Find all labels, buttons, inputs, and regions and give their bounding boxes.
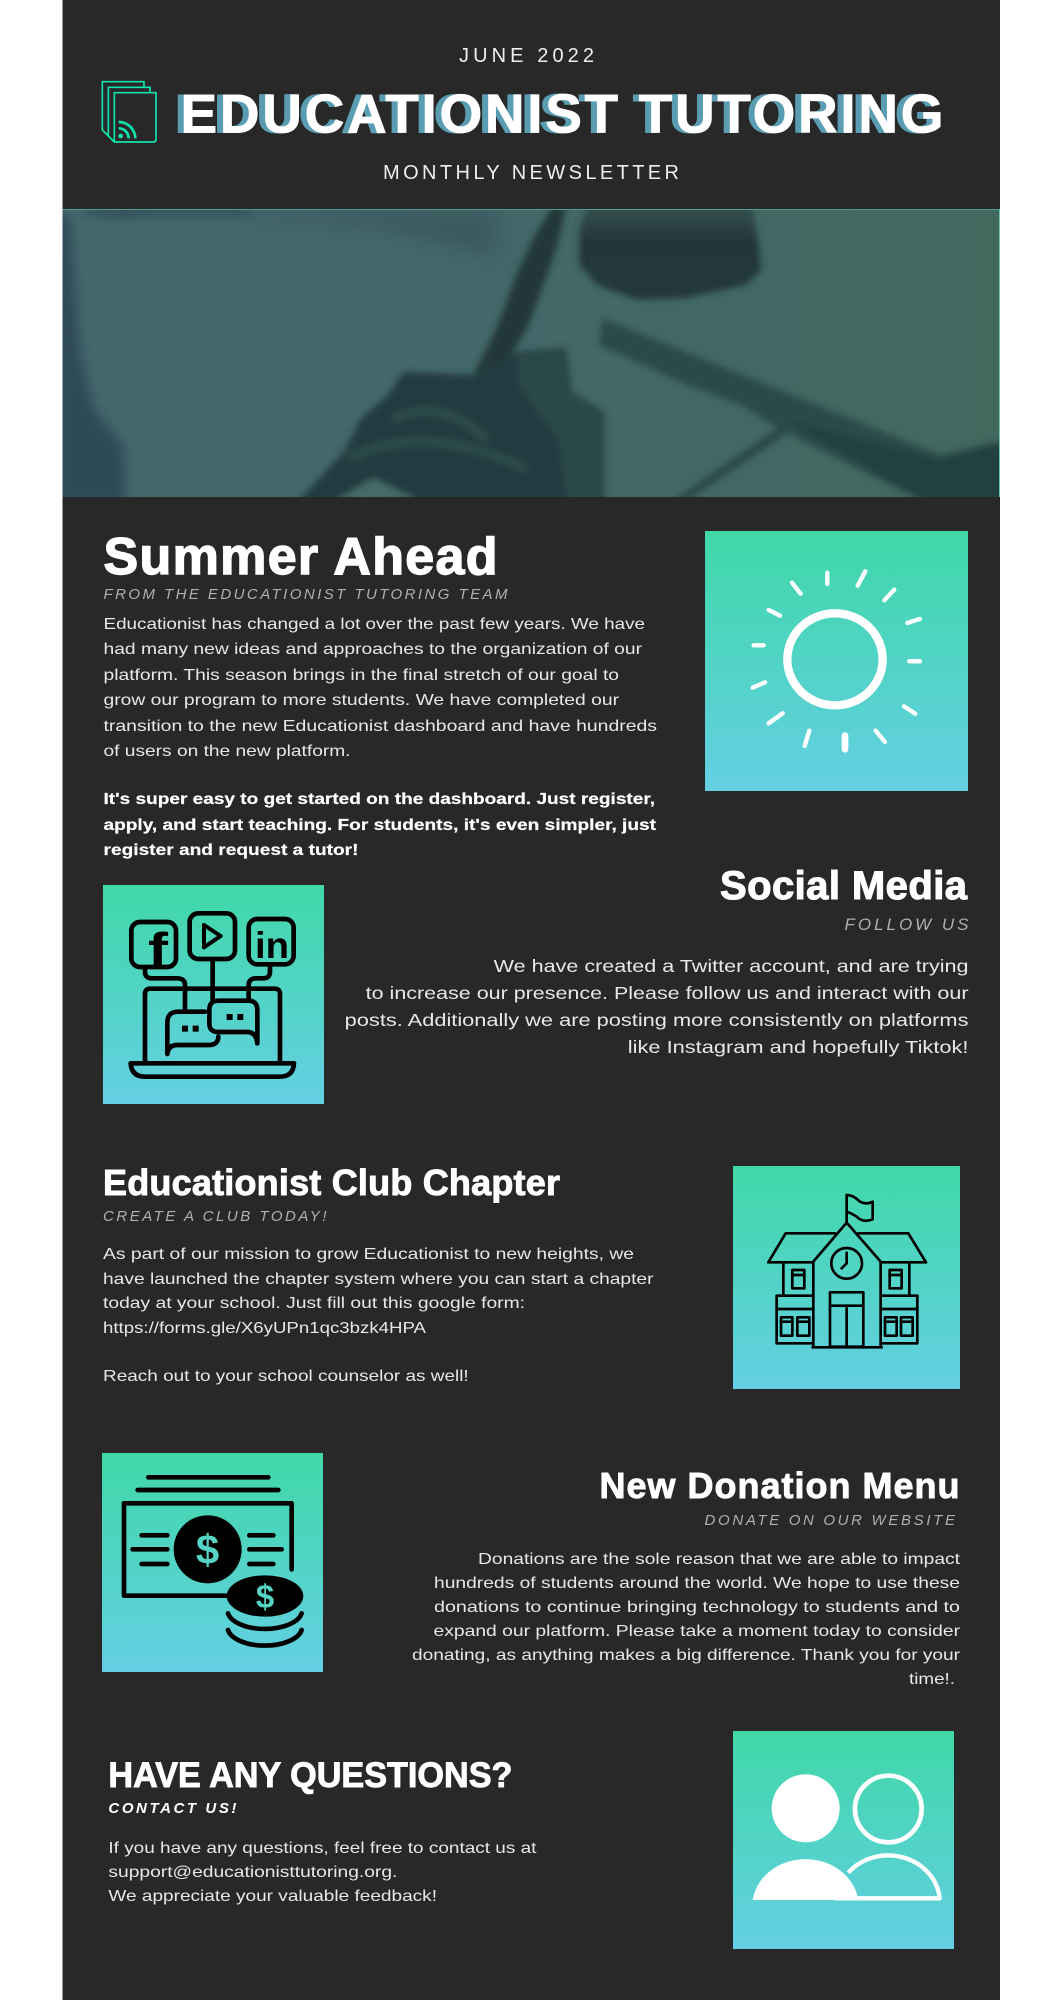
body text	[412, 1551, 961, 1688]
dollar signs: $	[256, 1578, 274, 1615]
heading: Social Media	[720, 864, 968, 908]
heading: Educationist Club Chapter	[103, 1162, 560, 1203]
bold callout text: It's super easy to get started on the dashboard. Just register,	[104, 791, 655, 808]
body text: had many new ideas and approaches to the organization of our	[104, 641, 643, 658]
icon: school building	[733, 1166, 960, 1389]
body text: today at your school. Just fill out this google form:	[103, 1295, 525, 1312]
body text: Educationist has changed a lot over the past few years. We have	[104, 616, 645, 633]
body text: We appreciate your valuable feedback!	[108, 1888, 437, 1905]
body text: hundreds of students around the world. We hope to use these	[434, 1575, 960, 1592]
dollar signs	[196, 1526, 274, 1615]
panel: new donation menu	[102, 1453, 961, 1688]
body text: donating, as anything makes a big difference. Thank you for your	[412, 1647, 961, 1664]
heading: New Donation Menu	[600, 1465, 960, 1506]
hero photo: hand writing with pencil	[55, 205, 1005, 505]
body text: We have created a Twitter account, and are trying	[494, 956, 968, 976]
title: EDUCATIONIST TUTORING	[180, 82, 944, 144]
body text: expand our platform. Please take a moment today to consider	[434, 1623, 961, 1640]
subheading: CREATE A CLUB TODAY!	[103, 1208, 327, 1225]
panel: social media	[103, 864, 969, 1104]
bold callout text: apply, and start teaching. For students, it's even simpler, just	[104, 817, 656, 834]
app letters	[148, 923, 289, 975]
title: EDUCATIONIST TUTORING	[174, 82, 938, 144]
body text	[103, 1246, 654, 1385]
dollar signs: $	[196, 1526, 219, 1573]
body text: support@educationisttutoring.org.	[108, 1864, 397, 1881]
app letters: f	[148, 923, 169, 975]
body text: Donations are the sole reason that we are able to impact	[478, 1551, 961, 1568]
body text: like Instagram and hopefully Tiktok!	[628, 1037, 968, 1057]
subheading: FOLLOW US	[844, 915, 969, 934]
icon: two people	[733, 1731, 954, 1949]
body text: transition to the new Educationist dashboard and have hundreds	[104, 718, 657, 735]
date line: JUNE 2022	[459, 45, 594, 67]
body text	[345, 956, 969, 1057]
body text: to increase our presence. Please follow us and interact with our	[366, 983, 969, 1003]
title: EDUCATIONIST TUTORING	[178, 82, 940, 144]
app letters: in	[255, 925, 289, 966]
panel: educationist club chapter	[103, 1162, 960, 1389]
body text: posts. Additionally we are posting more consistently on platforms	[345, 1010, 969, 1030]
icon: sun	[705, 531, 968, 791]
subtitle: MONTHLY NEWSLETTER	[383, 162, 679, 184]
body text: donations to continue bringing technology to students and to	[434, 1599, 960, 1616]
subheading: FROM THE EDUCATIONIST TUTORING TEAM	[104, 586, 508, 603]
subheading: CONTACT US!	[108, 1800, 236, 1817]
body text: As part of our mission to grow Educationist to new heights, we	[103, 1246, 634, 1263]
body text: time!.	[909, 1671, 955, 1688]
icon: logo stacked pages with rss signal	[102, 82, 156, 142]
panel: summer ahead	[104, 528, 968, 859]
body text: https://forms.gle/X6yUPn1qc3bzk4HPA	[103, 1320, 426, 1337]
subheading: DONATE ON OUR WEBSITE	[704, 1512, 956, 1529]
body text: of users on the new platform.	[104, 743, 350, 760]
body text: Reach out to your school counselor as well!	[103, 1368, 469, 1385]
bold callout text: register and request a tutor!	[104, 842, 358, 859]
body text: have launched the chapter system where you can start a chapter	[103, 1271, 654, 1288]
header	[102, 45, 944, 184]
bold callout text	[104, 791, 656, 859]
heading: Summer Ahead	[104, 528, 498, 586]
icon: banknote and coins	[102, 1453, 323, 1672]
icon: laptop with social apps	[103, 885, 324, 1104]
body text	[108, 1840, 537, 1905]
body text: grow our program to more students. We have completed our	[104, 692, 620, 709]
body text	[104, 616, 657, 760]
body text: If you have any questions, feel free to contact us at	[108, 1840, 537, 1857]
panel: have any questions	[108, 1731, 954, 1949]
body text: platform. This season brings in the final stretch of our goal to	[104, 667, 619, 684]
heading: HAVE ANY QUESTIONS?	[108, 1756, 512, 1795]
